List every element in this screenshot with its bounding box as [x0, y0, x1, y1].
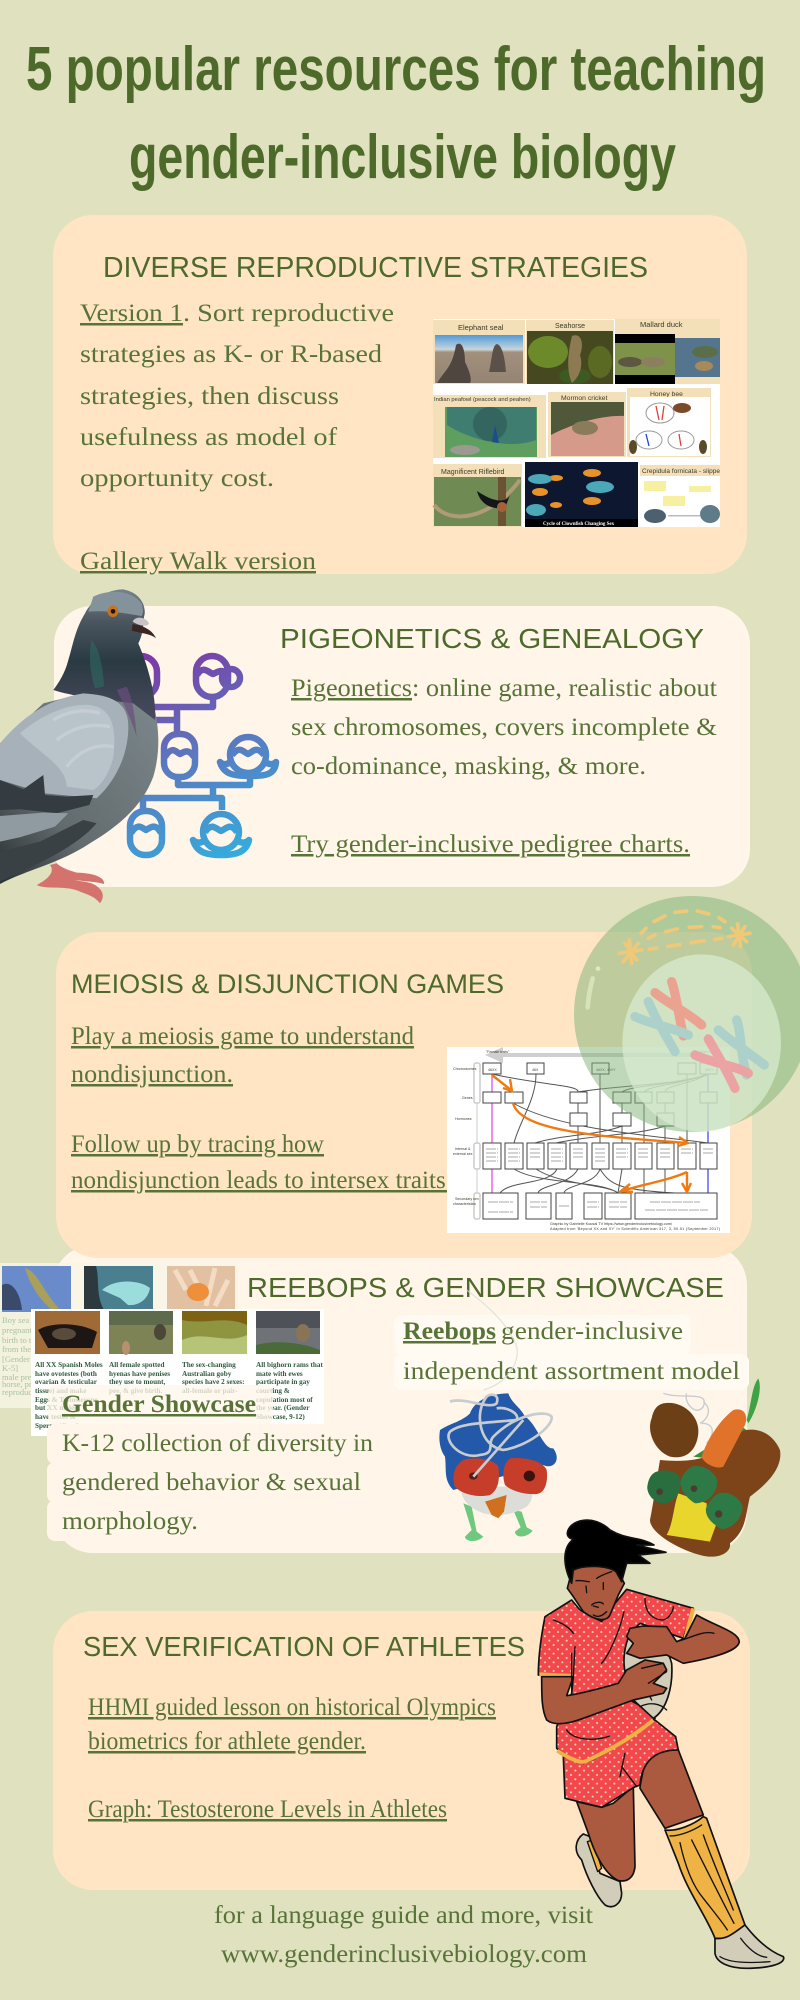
gender showcase front card: courting & [256, 1387, 290, 1395]
text: version 1 description: . Sort reproductive [183, 300, 394, 327]
gender showcase back card: K-5] [2, 1363, 18, 1373]
text: version 1 description: usefulness as model of [80, 424, 338, 451]
heading: sex verification of athletes: SEX VERIFICATION OF ATHLETES [83, 1631, 525, 1662]
illustration: reebop two [647, 1378, 780, 1557]
gender showcase back card: from the [2, 1344, 31, 1354]
gender showcase front card: have ovotestes (both [35, 1370, 97, 1378]
text: version 1 description: Gallery Walk version [80, 548, 317, 575]
gender showcase back card: reproduction, [2, 1387, 48, 1397]
flowchart: pathways of sex development: Secondary sex [455, 1197, 479, 1201]
text: reebops description [394, 1315, 749, 1390]
flowchart: pathways of sex development: Graphic by Gabrielle Kousal TV https://www.genderinclusivebiology.com/ [550, 1222, 673, 1226]
gender showcase front card: All bighorn rams that [256, 1361, 323, 1369]
illustration: rugby athlete [538, 1520, 784, 1968]
gender showcase back card: horse, pregna [2, 1379, 48, 1389]
gender showcase back card: [Gender [2, 1354, 30, 1364]
panel: diverse reproductive strategies [53, 215, 747, 575]
text: gender showcase: Gender Showcase [62, 1391, 256, 1418]
flowchart: pathways of sex development: external sex [453, 1152, 473, 1156]
gender showcase front card: Eggs & Testosterone [35, 1396, 98, 1404]
text: gender showcase: K-12 collection of diversity in [62, 1430, 374, 1457]
gender showcase front card: all-female or pair- [182, 1387, 238, 1395]
flowchart: pathways of sex development: Internal & [455, 1147, 471, 1151]
text: pigeonetics description: Try gender-inclusive pedigree charts. [291, 831, 690, 858]
gender showcase front card: copulation most of [256, 1396, 313, 1404]
text: gender showcase [62, 1391, 374, 1535]
gender showcase back card: birth to t [2, 1335, 32, 1345]
photo collage: species [433, 319, 720, 527]
heading: pigeonetics and genealogy: PIGEONETICS & GENEALOGY [280, 623, 704, 654]
text: pigeonetics description: sex chromosomes, covers incomplete & [291, 714, 717, 741]
footer text [214, 1902, 593, 1968]
flowchart: pathways of sex development: 46XY [705, 1068, 714, 1072]
flowchart: pathways of sex development: 46X [532, 1068, 539, 1072]
gender showcase back card: male pregnan [2, 1372, 49, 1382]
gender showcase front card: All XX Spanish Moles [35, 1361, 103, 1369]
gender showcase back card: pregnant [2, 1325, 32, 1335]
text: reebops description: independent assortment model [403, 1358, 740, 1385]
footer text: www.genderinclusivebiology.com [221, 1941, 588, 1968]
flowchart: pathways of sex development [447, 1047, 730, 1233]
gender showcase front card: Showcase, 9-12) [256, 1413, 305, 1421]
illustration: reebop one [439, 1290, 557, 1541]
text: meiosis links: Follow up by tracing how [71, 1131, 324, 1158]
chromosomes [635, 982, 764, 1088]
heading: reebops and gender showcase: REEBOPS & GENDER SHOWCASE [247, 1272, 724, 1303]
flowchart: pathways of sex development: 46XX, 46XY [596, 1068, 616, 1072]
text: pigeonetics description: Pigeonetics [291, 675, 412, 702]
gender showcase front card: Australian goby [182, 1370, 232, 1378]
flowchart: pathways of sex development: 46XX [488, 1068, 497, 1072]
text: gender showcase: gendered behavior & sexual [62, 1469, 361, 1496]
text: meiosis links [71, 1023, 452, 1194]
photo collage: species: Crepidula fornicata - slippe [642, 468, 720, 475]
gender showcase front card: ovarian & testicular [35, 1378, 98, 1386]
flowchart: pathways of sex development: Genes [462, 1096, 473, 1100]
flowchart: pathways of sex development: "Male traits" [699, 1050, 719, 1054]
gender showcase front card: they use to mount, [109, 1378, 166, 1386]
photo collage: species: Indian peafowl (peacock and peahen) [434, 397, 531, 403]
photo collage: species: Elephant seal [458, 323, 504, 332]
heading: diverse reproductive strategies: DIVERSE REPRODUCTIVE STRATEGIES [103, 252, 648, 284]
gender showcase back card: Boy sea h [2, 1315, 36, 1325]
text: reebops description: Reebops [403, 1318, 496, 1345]
illustration: pigeon [0, 589, 158, 903]
text: meiosis links: nondisjunction. [71, 1061, 233, 1088]
text: athlete links [88, 1694, 496, 1823]
text: pigeonetics description: co-dominance, masking, & more. [291, 753, 646, 780]
gender showcase front card: the year. (Gender [256, 1404, 310, 1412]
icon: pedigree chart [124, 656, 276, 855]
flowchart: pathways of sex development: characteristics [453, 1202, 476, 1206]
gender showcase back card [0, 1263, 238, 1408]
gender showcase front card: hyenas have penises [109, 1370, 170, 1378]
flowchart: pathways of sex development: Chromosomes [453, 1067, 477, 1071]
gender showcase front card: tissue) and make [35, 1387, 87, 1395]
gender showcase front card: All female spotted [109, 1361, 164, 1369]
gender showcase front card: mate with ewes [256, 1370, 303, 1378]
flowchart: pathways of sex development: Adapted from 'Beyond XX and XY' in Scientific American 317, 3, 50-51 (September 2017) [550, 1227, 721, 1231]
gender showcase front card [31, 1309, 324, 1436]
gender showcase front card: The sex-changing [182, 1361, 236, 1369]
photo collage: species: Mallard duck [640, 320, 683, 329]
photo collage: species: Seahorse [555, 323, 585, 330]
text: version 1 description: opportunity cost. [80, 465, 274, 492]
text: pigeonetics description: : online game, realistic about [412, 675, 717, 702]
photo collage: species: Mormon cricket [561, 395, 608, 402]
gender showcase front card: species have 2 sexes: [182, 1378, 244, 1386]
text: athlete links: HHMI guided lesson on historical Olympics [88, 1694, 496, 1721]
heading: meiosis and disjunction games: MEIOSIS & DISJUNCTION GAMES [71, 969, 504, 999]
panel: reebops and gender showcase [0, 1245, 780, 1557]
text: version 1 description: strategies, then discuss [80, 383, 339, 410]
photo collage: species: Cycle of Clownfish Changing Sex [543, 522, 615, 527]
gender showcase front card: pee, & give birth. [109, 1387, 163, 1395]
footer text: for a language guide and more, visit [214, 1902, 593, 1929]
illustration: cell with chromosomes [574, 896, 800, 1132]
gender showcase front card: participate in gay [256, 1378, 310, 1386]
panel: pigeonetics and genealogy [0, 589, 750, 903]
text: version 1 description: strategies as K- or R-based [80, 341, 383, 368]
text: gender showcase: morphology. [62, 1508, 198, 1535]
flowchart: pathways of sex development: "Female traits" [486, 1050, 510, 1054]
flowchart: pathways of sex development: Hormones [455, 1117, 472, 1121]
text: version 1 description: Version 1 [80, 300, 183, 327]
title [26, 35, 766, 192]
text highlights: gender showcase [47, 1385, 387, 1541]
photo collage: species: Magnificent Riflebird [441, 469, 505, 476]
text: athlete links: biometrics for athlete gender. [88, 1728, 366, 1755]
photo collage: species: Honey bee [650, 391, 683, 398]
text: reebops description: gender-inclusive [501, 1318, 683, 1345]
text: meiosis links: Play a meiosis game to understand [71, 1023, 414, 1050]
text: version 1 description [80, 300, 394, 575]
gender showcase front card: have testes & [35, 1413, 76, 1421]
text: athlete links: Graph: Testosterone Levels in Athletes [88, 1796, 447, 1823]
gender showcase front card: Sperm. (Gender [35, 1422, 85, 1430]
text: meiosis links: nondisjunction leads to intersex traits. [71, 1167, 452, 1194]
panel: meiosis and disjunction games [56, 896, 800, 1258]
sparkle trail [619, 911, 750, 963]
gender showcase front card: but XX moles [35, 1404, 77, 1412]
text: pigeonetics description [291, 675, 717, 858]
panel: sex verification of athletes [53, 1611, 750, 1890]
